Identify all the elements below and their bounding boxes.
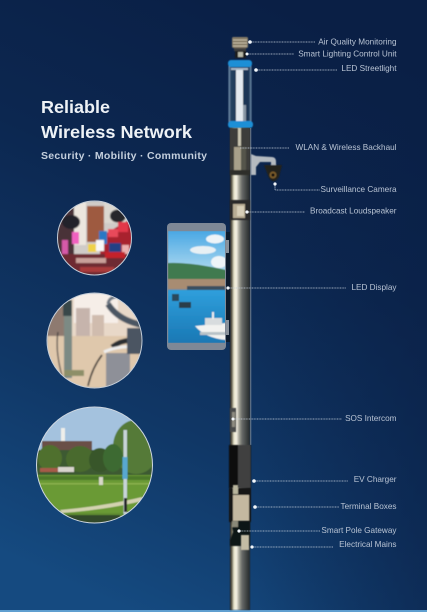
callout: LED Streetlight: LED Streetlight xyxy=(341,64,397,73)
broadcast loudspeaker xyxy=(230,200,250,220)
callout: SOS Intercom: SOS Intercom xyxy=(345,414,397,423)
callout: Surveillance Camera: Surveillance Camera xyxy=(320,185,397,194)
callout: Smart Lighting Control Unit: Smart Lighting Control Unit xyxy=(298,50,397,58)
callout: Broadcast Loudspeaker xyxy=(245,206,397,216)
callout: Terminal Boxes: Terminal Boxes xyxy=(341,502,396,511)
title: Reliable xyxy=(41,97,110,117)
EV charger xyxy=(229,445,251,488)
title: Wireless Network xyxy=(41,122,192,142)
callout: Smart Pole Gateway xyxy=(237,526,397,535)
callout: Terminal Boxes xyxy=(253,502,396,511)
callout: Broadcast Loudspeaker: Broadcast Loudspeaker xyxy=(310,206,397,216)
callout: Electrical Mains xyxy=(250,540,396,549)
WLAN backhaul unit xyxy=(230,128,250,175)
air quality sensor xyxy=(232,37,248,58)
photo circle: campus lawn with smart pole xyxy=(36,407,159,525)
callout: LED Streetlight xyxy=(254,64,397,73)
LED display panel xyxy=(167,223,230,350)
smart pole gateway xyxy=(230,521,250,546)
electrical mains xyxy=(241,535,249,550)
callout: LED Display: LED Display xyxy=(351,283,397,292)
LED streetlight xyxy=(228,60,253,128)
callout: Electrical Mains: Electrical Mains xyxy=(339,540,396,549)
callout: Smart Lighting Control Unit xyxy=(246,50,397,58)
title xyxy=(41,97,192,142)
callout: EV Charger: EV Charger xyxy=(354,475,397,484)
SOS intercom xyxy=(230,408,236,432)
callout: Air Quality Monitoring xyxy=(248,38,397,46)
pole shaft xyxy=(230,127,250,610)
terminal boxes xyxy=(229,485,251,522)
smart pole xyxy=(167,37,282,610)
callout: LED Display xyxy=(226,283,397,292)
surveillance camera xyxy=(251,154,282,181)
callout: EV Charger xyxy=(252,475,397,484)
callout: SOS Intercom xyxy=(232,414,397,423)
callout: Surveillance Camera xyxy=(273,182,397,194)
thin pole edge line xyxy=(250,128,252,445)
callout: Smart Pole Gateway: Smart Pole Gateway xyxy=(321,526,397,535)
photo circle: city square xyxy=(57,201,132,275)
callout: WLAN and Wireless Backhaul: WLAN & Wireless Backhaul xyxy=(295,143,397,152)
callout: Air Quality Monitoring: Air Quality Monitoring xyxy=(318,38,397,46)
subtitle: Security · Mobility · Community xyxy=(41,150,207,162)
photo circle: street with charging station xyxy=(47,293,142,388)
